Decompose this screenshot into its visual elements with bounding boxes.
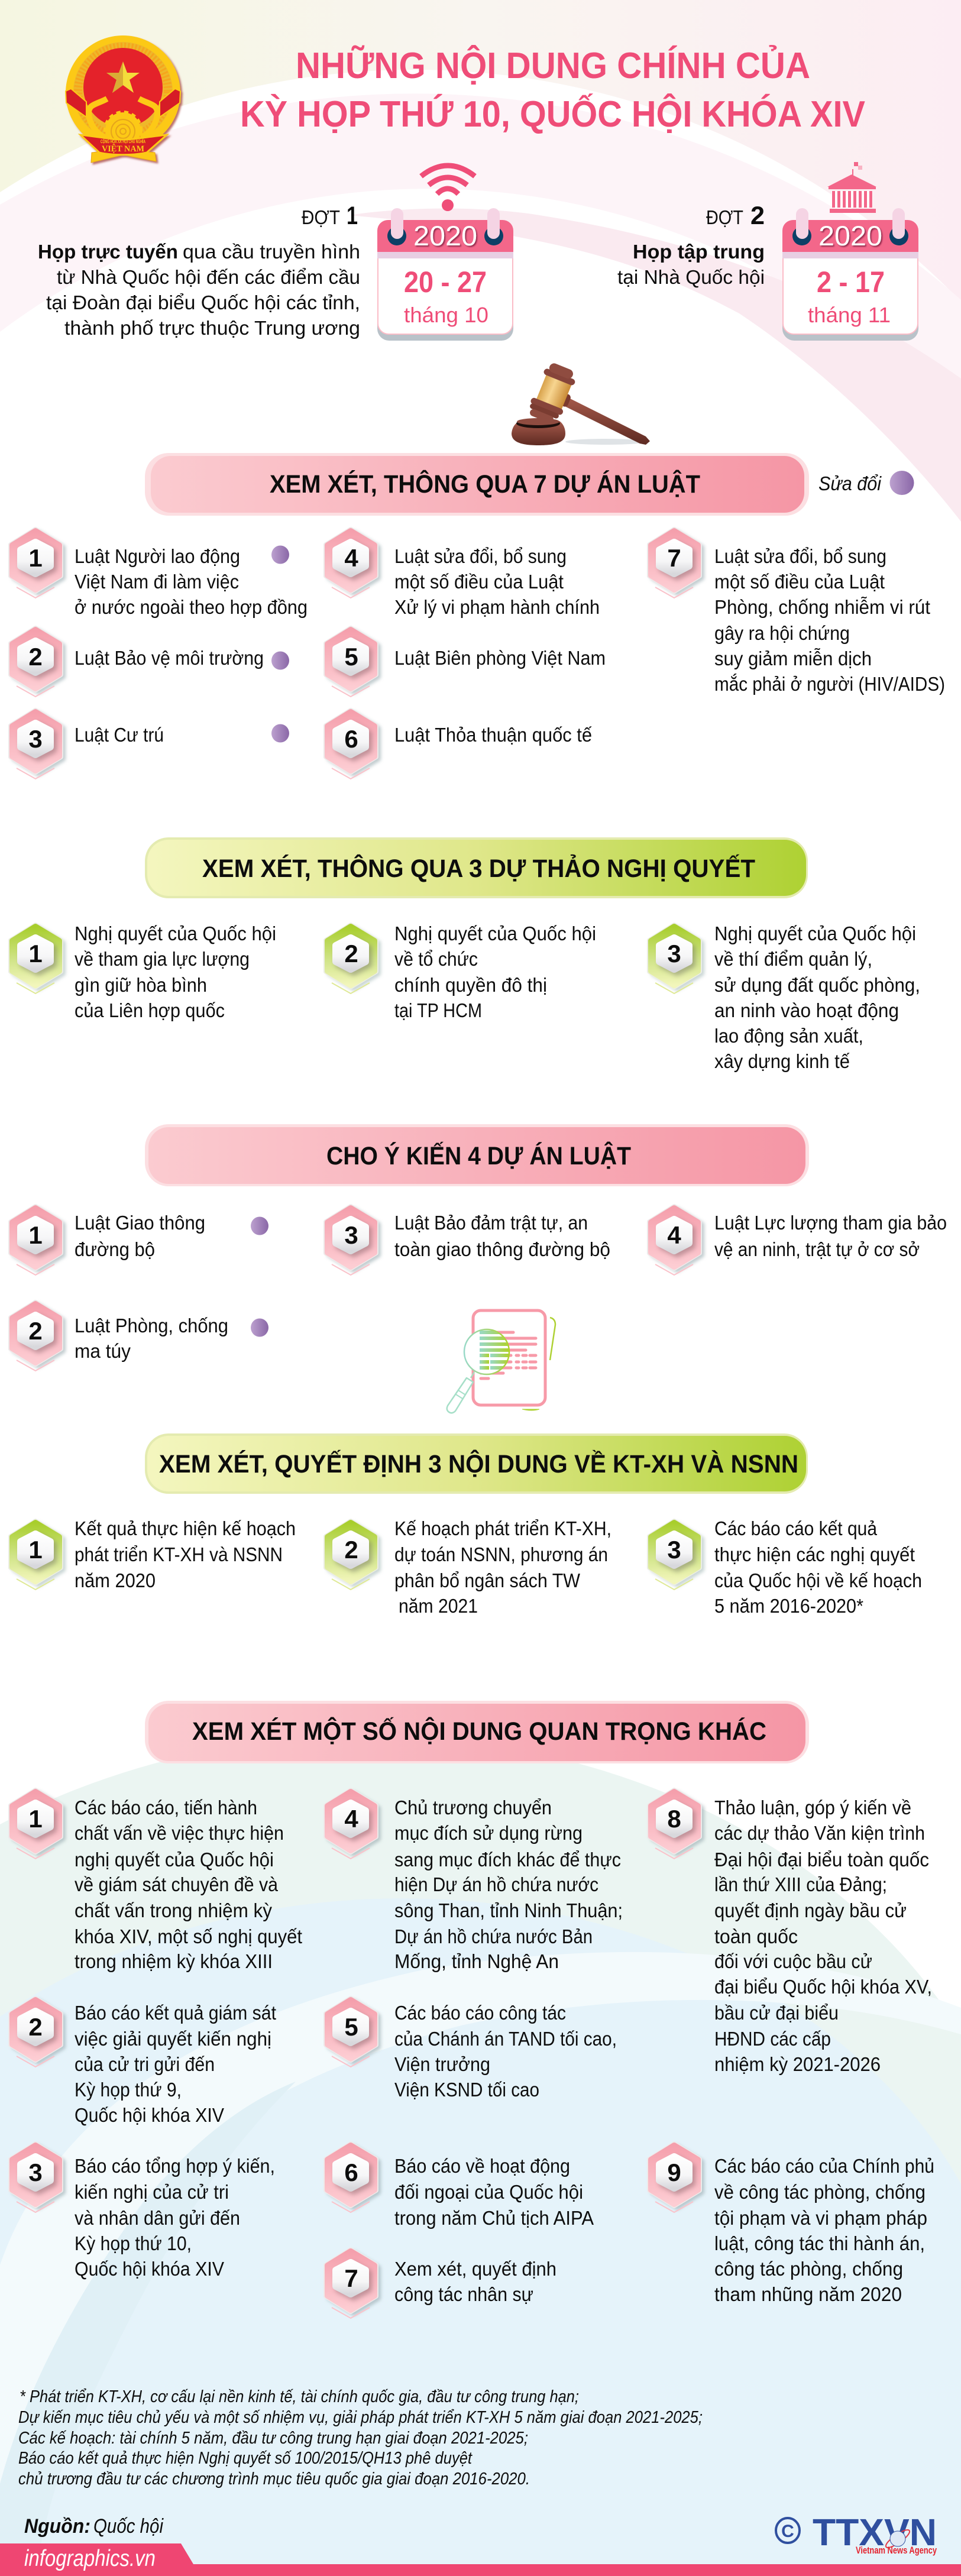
item: other 8: Thảo luận, góp ý kiến về	[714, 1797, 911, 1818]
item: resolution 2: chính quyền đô thị	[394, 974, 547, 996]
item: content 3: Các báo cáo kết quả	[714, 1517, 878, 1539]
item: other 5: Viện trưởng	[394, 2053, 490, 2075]
item: other 1: Các báo cáo, tiến hành	[75, 1797, 257, 1818]
session 1 label	[302, 202, 358, 230]
footnote: Báo cáo kết quả thực hiện Nghị quyết số 100/2015/QH13 phê duyệt	[18, 2449, 473, 2468]
item: content 2	[326, 1517, 611, 1617]
item: other 8: quyết định ngày bầu cử	[714, 1899, 907, 1921]
item: law 7	[649, 529, 945, 695]
item: resolution 1: gìn giữ hòa bình	[75, 974, 207, 996]
item: other 8: Đại hội đại biểu toàn quốc	[714, 1849, 929, 1870]
item: other 4: hiện Dự án hồ chứa nước	[394, 1873, 598, 1895]
item: other 1	[11, 1790, 302, 1972]
session 1 label: ĐỢT	[302, 206, 340, 228]
legend: amended: Sửa đổi	[818, 473, 882, 494]
item: resolution 3: xây dựng kinh tế	[714, 1050, 850, 1072]
item: content 3	[649, 1517, 922, 1617]
item: content 1: năm 2020	[75, 1569, 156, 1591]
item: resolution 2: tại TP HCM	[394, 999, 482, 1021]
item: law 7: Phòng, chống nhiễm vi rút	[714, 596, 930, 618]
item: other 1: khóa XIV, một số nghị quyết	[75, 1925, 302, 1947]
heading: section 1: XEM XÉT, THÔNG QUA 7 DỰ ÁN LUẬT	[270, 470, 700, 499]
item: resolution 2: Nghị quyết của Quốc hội	[394, 923, 596, 944]
item: other 2	[11, 1998, 276, 2126]
item: other 5: Các báo cáo công tác	[394, 2002, 566, 2024]
item: resolution 1: về tham gia lực lượng	[75, 948, 250, 970]
item: law 5: Luật Biên phòng Việt Nam	[394, 647, 606, 669]
item: other 3: Báo cáo tổng hợp ý kiến,	[75, 2155, 275, 2177]
panel: section 4, socio-economic and budget	[11, 1433, 922, 1617]
item: law 1	[11, 529, 308, 618]
heading: section 4: XEM XÉT, QUYẾT ĐỊNH 3 NỘI DUNG VỀ KT-XH VÀ NSNN	[159, 1449, 798, 1478]
item: content 1: 1	[28, 1536, 43, 1564]
session 2 description: tại Nhà Quốc hội	[617, 266, 765, 288]
item: content 2: Kế hoạch phát triển KT-XH,	[394, 1517, 611, 1539]
item: other 6: 6	[344, 2158, 358, 2186]
item: resolution 3	[649, 923, 920, 1072]
item: draft law 4: Luật Lực lượng tham gia bảo	[714, 1212, 947, 1234]
legend: amended	[818, 471, 914, 495]
item: other 6: đối ngoại của Quốc hội	[394, 2181, 583, 2203]
item: other 6	[326, 2144, 594, 2229]
item: other 4: 4	[344, 1805, 358, 1833]
calendar 2: 2 - 17	[817, 266, 885, 299]
session 1 description: từ Nhà Quốc hội đến các điểm cầu	[57, 266, 360, 288]
item: law 1: ở nước ngoài theo hợp đồng	[75, 596, 308, 618]
item: other 1: 1	[28, 1805, 43, 1833]
heading: section 5	[145, 1701, 809, 1763]
item: draft law 1: 1	[28, 1221, 43, 1249]
icon: document with magnifier	[447, 1310, 555, 1413]
footnote: Dự kiến mục tiêu chủ yếu và một số nhiệm vụ, giải pháp phát triển KT-XH 5 năm giai đoạn 2021-2025;	[18, 2408, 703, 2427]
item: resolution 2: 2	[344, 940, 358, 967]
item: other 1: chất vấn trong nhiệm kỳ	[75, 1899, 272, 1921]
item: other 7	[326, 2250, 556, 2318]
session 1 description: tại Đoàn đại biểu Quốc hội các tỉnh,	[46, 292, 360, 313]
item: draft law 1: đường bộ	[75, 1238, 155, 1260]
item: other 4: sang mục đích khác để thực	[394, 1849, 621, 1870]
item: other 8: toàn quốc	[714, 1925, 798, 1947]
item: law 3	[11, 710, 289, 779]
heading: section 4	[145, 1433, 808, 1494]
item: content 2: dự toán NSNN, phương án	[394, 1543, 608, 1565]
item: other 2: Báo cáo kết quả giám sát	[75, 2002, 276, 2024]
item: other 9: tội phạm và vi phạm pháp	[714, 2207, 927, 2229]
item: resolution 3: 3	[667, 940, 681, 967]
item: other 5: Viện KSND tối cao	[394, 2079, 539, 2101]
session 1 label: 1	[347, 202, 358, 230]
logo: TTXVN: Vietnam News Agency	[856, 2545, 937, 2556]
panel: section 3, opinions on four draft laws	[11, 1124, 947, 1413]
item: law 2: Luật Bảo vệ môi trường	[75, 647, 264, 669]
item: law 6: 6	[344, 725, 358, 753]
session 2 description	[617, 241, 765, 288]
item: law 1: Luật Người lao động	[75, 545, 240, 567]
item: other 9: 9	[667, 2158, 681, 2186]
item: law 4: Luật sửa đổi, bổ sung	[394, 545, 567, 567]
item: law 7: suy giảm miễn dịch	[714, 648, 872, 669]
logo: TTXVN: TTXVN	[813, 2511, 937, 2554]
item: resolution 2: về tổ chức	[394, 948, 478, 970]
item: other 4: Dự án hồ chứa nước Bản	[394, 1925, 593, 1947]
heading: section 5: XEM XÉT MỘT SỐ NỘI DUNG QUAN TRỌNG KHÁC	[192, 1717, 766, 1746]
session 2 label	[706, 202, 765, 230]
title	[240, 46, 865, 135]
item: resolution 2	[326, 923, 596, 1021]
item: other 8: HĐND các cấp	[714, 2028, 831, 2050]
item: content 2: 2	[344, 1536, 358, 1564]
item: other 9: tham nhũng năm 2020	[714, 2283, 902, 2305]
item: resolution 3: Nghị quyết của Quốc hội	[714, 923, 916, 944]
footnote: chủ trương đầu tư các chương trình mục tiêu quốc gia giai đoạn 2016-2020.	[18, 2470, 530, 2488]
item: resolution 3: lao động sản xuất,	[714, 1025, 863, 1047]
item: other 1: trong nhiệm kỳ khóa XIII	[75, 1950, 273, 1972]
session 2 label: ĐỢT	[706, 206, 743, 228]
icon: wifi	[421, 166, 475, 211]
item: other 8: lần thứ XIII của Đảng;	[714, 1873, 887, 1895]
session 2 label: 2	[750, 202, 765, 230]
item: draft law 1: Luật Giao thông	[75, 1212, 205, 1234]
item: resolution 3: về thí điểm quản lý,	[714, 948, 872, 970]
heading: section 2: XEM XÉT, THÔNG QUA 3 DỰ THẢO NGHỊ QUYẾT	[202, 854, 755, 883]
item: other 2: Quốc hội khóa XIV	[75, 2104, 224, 2126]
session 1 description: Họp trực tuyến	[38, 241, 178, 263]
session 1 description	[38, 241, 360, 339]
item: other 3: Quốc hội khóa XIV	[75, 2258, 224, 2280]
icon: gavel	[512, 360, 650, 445]
footer bar: infographics.vn	[24, 2546, 156, 2571]
session 1 description: thành phố trực thuộc Trung ương	[64, 317, 360, 339]
calendar 2: 2020	[818, 220, 882, 251]
item: other 5	[326, 1998, 617, 2101]
icon: parliament building	[827, 162, 876, 213]
item: law 4: 4	[344, 544, 358, 572]
item: other 9	[649, 2144, 934, 2305]
item: other 9: Các báo cáo của Chính phủ	[714, 2155, 934, 2177]
title: KỲ HỌP THỨ 10, QUỐC HỘI KHÓA XIV	[240, 94, 865, 135]
item: content 1	[11, 1517, 296, 1591]
item: other 5: của Chánh án TAND tối cao,	[394, 2028, 617, 2050]
item: other 6: Báo cáo về hoạt động	[394, 2155, 570, 2177]
item: resolution 1: Nghị quyết của Quốc hội	[75, 923, 276, 944]
item: other 3: kiến nghị của cử tri	[75, 2181, 229, 2203]
item: law 1: Việt Nam đi làm việc	[75, 571, 239, 593]
item: resolution 1: 1	[28, 940, 43, 967]
item: other 2: 2	[28, 2013, 43, 2041]
item: law 5: 5	[344, 643, 358, 671]
emblem: national emblem of Vietnam	[66, 35, 180, 163]
item: other 1: về giám sát chuyên đề và	[75, 1873, 279, 1895]
item: other 7: công tác nhân sự	[394, 2283, 533, 2305]
source: Nguồn:	[24, 2515, 90, 2538]
item: other 2: việc giải quyết kiến nghị	[75, 2028, 271, 2050]
item: law 3: Luật Cư trú	[75, 724, 164, 746]
item: other 7: Xem xét, quyết định	[394, 2258, 556, 2280]
footnote	[18, 2387, 703, 2488]
calendar 2	[782, 208, 918, 341]
item: other 4: mục đích sử dụng rừng	[394, 1822, 583, 1844]
item: other 9: về công tác phòng, chống	[714, 2181, 926, 2203]
item: law 7: gây ra hội chứng	[714, 622, 850, 644]
item: content 1: Kết quả thực hiện kế hoạch	[75, 1517, 296, 1539]
item: other 4: sông Than, tỉnh Ninh Thuận;	[394, 1899, 623, 1921]
item: content 3: của Quốc hội về kế hoạch	[714, 1569, 922, 1591]
item: other 7: 7	[344, 2264, 358, 2292]
item: resolution 1	[11, 923, 276, 1021]
heading: section 2	[145, 837, 808, 898]
item: other 4: Mống, tỉnh Nghệ An	[394, 1950, 559, 1972]
item: other 8: các dự thảo Văn kiện trình	[714, 1822, 925, 1844]
item: draft law 3: Luật Bảo đảm trật tự, an	[394, 1212, 588, 1234]
logo: TTXVN: C	[781, 2522, 794, 2541]
panel: section 5, other important contents	[11, 1701, 934, 2318]
item: draft law 4	[649, 1206, 947, 1275]
title: NHỮNG NỘI DUNG CHÍNH CỦA	[296, 46, 810, 86]
heading: section 3: CHO Ý KIẾN 4 DỰ ÁN LUẬT	[326, 1141, 631, 1170]
item: resolution 1: của Liên hợp quốc	[75, 999, 225, 1021]
item: other 8: đại biểu Quốc hội khóa XV,	[714, 1976, 932, 1998]
item: other 8: bầu cử đại biểu	[714, 2002, 839, 2024]
background: bottom domes	[0, 1736, 961, 2576]
item: content 3: 5 năm 2016-2020*	[714, 1595, 863, 1617]
item: other 1: nghị quyết của Quốc hội	[75, 1849, 274, 1870]
item: law 5	[326, 628, 606, 697]
item: other 5: 5	[344, 2013, 358, 2041]
item: other 6: trong năm Chủ tịch AIPA	[394, 2207, 594, 2229]
item: other 2: Kỳ họp thứ 9,	[75, 2079, 182, 2101]
item: draft law 2: ma túy	[75, 1340, 131, 1362]
item: law 7: một số điều của Luật	[714, 571, 885, 593]
item: draft law 2: 2	[28, 1317, 43, 1345]
panel: session 2	[617, 162, 918, 341]
calendar 1: 20 - 27	[404, 266, 487, 299]
item: draft law 4: vệ an ninh, trật tự ở cơ sở	[714, 1238, 920, 1260]
item: other 3: Kỳ họp thứ 10,	[75, 2232, 192, 2254]
item: draft law 4: 4	[667, 1221, 681, 1249]
item: draft law 2	[11, 1302, 268, 1371]
footnote: * Phát triển KT-XH, cơ cấu lại nền kinh tế, tài chính quốc gia, đầu tư công trung hạn;	[20, 2387, 579, 2406]
source: Quốc hội	[93, 2515, 164, 2538]
item: other 3: và nhân dân gửi đến	[75, 2207, 240, 2229]
background: top swooshes	[0, 0, 961, 591]
item: content 1: phát triển KT-XH và NSNN	[75, 1543, 283, 1565]
item: law 1: 1	[28, 544, 43, 572]
item: law 4: một số điều của Luật	[394, 571, 564, 593]
emblem: national emblem of Vietnam: VIỆT NAM	[102, 144, 144, 154]
item: law 7: Luật sửa đổi, bổ sung	[714, 545, 886, 567]
session 2 description: Họp tập trung	[633, 241, 765, 263]
item: law 2	[11, 628, 289, 697]
item: other 3	[11, 2144, 275, 2280]
calendar 1: tháng 10	[404, 303, 488, 327]
item: other 4	[326, 1790, 623, 1972]
item: other 9: luật, công tác thi hành án,	[714, 2232, 925, 2254]
item: content 2: phân bổ ngân sách TW	[394, 1569, 581, 1591]
item: content 3: 3	[667, 1536, 681, 1564]
item: law 6	[326, 710, 592, 779]
item: draft law 2: Luật Phòng, chống	[75, 1315, 228, 1336]
heading: section 3	[145, 1124, 809, 1186]
item: other 8: đối với cuộc bầu cử	[714, 1950, 872, 1972]
calendar 1	[377, 208, 513, 341]
emblem: national emblem of Vietnam: CỘNG HÒA XÃ HỘI CHỦ NGHĨA	[101, 139, 145, 144]
item: law 6: Luật Thỏa thuận quốc tế	[394, 724, 592, 746]
calendar 2: tháng 11	[808, 303, 891, 327]
item: other 8	[649, 1790, 932, 2075]
item: draft law 3	[326, 1206, 610, 1275]
item: other 8: nhiệm kỳ 2021-2026	[714, 2053, 881, 2075]
item: law 7: 7	[667, 544, 681, 572]
footer bar	[0, 2543, 961, 2576]
item: resolution 3: an ninh vào hoạt động	[714, 999, 899, 1021]
heading: section 1	[145, 453, 809, 516]
item: draft law 1	[11, 1206, 268, 1275]
item: draft law 3: toàn giao thông đường bộ	[394, 1238, 610, 1260]
item: content 2: năm 2021	[399, 1595, 478, 1617]
item: law 4: Xử lý vi phạm hành chính	[394, 596, 600, 618]
item: other 3: 3	[28, 2158, 43, 2186]
item: other 4: Chủ trương chuyển	[394, 1797, 552, 1818]
panel: session 1	[38, 166, 513, 341]
item: law 4	[326, 529, 600, 618]
item: law 3: 3	[28, 725, 43, 753]
item: draft law 3: 3	[344, 1221, 358, 1249]
item: other 8: 8	[667, 1805, 681, 1833]
item: law 2: 2	[28, 643, 43, 671]
item: other 9: công tác phòng, chống	[714, 2258, 903, 2280]
panel: section 2, three draft resolutions	[11, 837, 920, 1072]
item: resolution 3: sử dụng đất quốc phòng,	[714, 974, 920, 996]
panel: section 1, seven draft laws	[11, 453, 945, 779]
calendar 1: 2020	[413, 220, 477, 251]
session 1 description: qua cầu truyền hình	[183, 241, 360, 263]
item: content 3: thực hiện các nghị quyết	[714, 1543, 915, 1565]
source	[24, 2515, 164, 2538]
item: other 2: của cử tri gửi đến	[75, 2053, 215, 2075]
footnote: Các kế hoạch: tài chính 5 năm, đầu tư công trung hạn giai đoạn 2021-2025;	[18, 2429, 528, 2448]
item: other 1: chất vấn về việc thực hiện	[75, 1822, 284, 1844]
